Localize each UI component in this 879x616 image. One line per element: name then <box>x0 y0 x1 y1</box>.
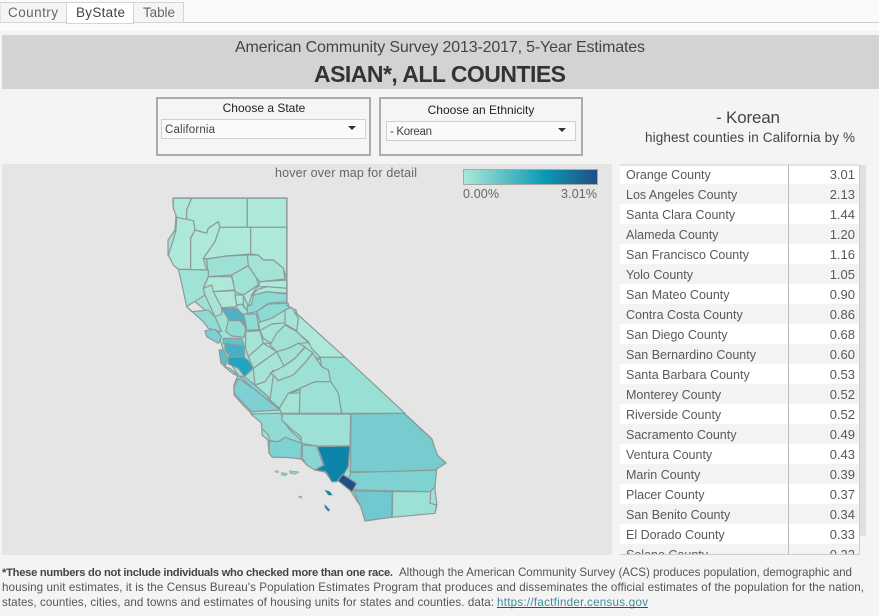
table rows: 0.33 <box>830 527 855 542</box>
filter: Choose an Ethnicity: Choose an Ethnicity <box>428 103 534 117</box>
header band <box>2 35 879 89</box>
filter: Choose an Ethnicity: - Korean <box>390 126 432 138</box>
table rows: Santa Barbara County <box>626 368 750 382</box>
table rows: 0.32 <box>830 547 855 562</box>
title: ASIAN*, ALL COUNTIES <box>314 61 566 87</box>
eastern counties <box>270 305 405 413</box>
map hint: hover over map for detail <box>275 166 417 180</box>
table rows: Placer County <box>626 488 705 502</box>
table rows: San Bernardino County <box>626 348 757 362</box>
link: https://factfinder.census.gov <box>497 596 648 609</box>
table rows: Contra Costa County <box>626 308 743 322</box>
table rows: Marin County <box>626 468 701 482</box>
table heading: highest counties in California by % <box>645 130 855 145</box>
panel: county table <box>620 164 866 562</box>
table rows: 1.05 <box>830 267 855 282</box>
tab: ByState: ByState <box>76 5 125 20</box>
tab bar <box>0 2 184 24</box>
table rows: Ventura County <box>626 448 713 462</box>
table rows: Solano County <box>626 548 709 562</box>
table rows: 0.68 <box>830 327 855 342</box>
table rows: San Diego County <box>626 328 728 342</box>
footnote: Although the American Community Survey (ACS) produces population, demographic and <box>399 566 852 579</box>
table rows: El Dorado County <box>626 528 725 542</box>
map legend: 0.00% <box>463 187 499 201</box>
filter: Choose a State <box>157 98 370 155</box>
tab: Country <box>0 2 66 22</box>
panel: map <box>2 164 612 555</box>
table rows: Monterey County <box>626 388 722 402</box>
northern counties <box>168 198 289 332</box>
southern counties <box>251 413 446 521</box>
table rows: 1.20 <box>830 227 855 242</box>
table rows: 0.53 <box>830 367 855 382</box>
table rows: 0.86 <box>830 307 855 322</box>
table rows: 0.39 <box>830 467 855 482</box>
table rows: San Benito County <box>626 508 731 522</box>
table rows: 1.16 <box>830 247 855 262</box>
table rows: 0.37 <box>830 487 855 502</box>
table rows: Alameda County <box>626 228 719 242</box>
table rows: Orange County <box>626 168 712 182</box>
tab: ByState <box>66 2 134 24</box>
table rows: 0.43 <box>830 447 855 462</box>
table rows: Riverside County <box>626 408 722 422</box>
central interior counties <box>246 309 320 410</box>
bay area counties <box>205 308 280 412</box>
footnote <box>2 566 864 609</box>
table rows: Santa Clara County <box>626 208 736 222</box>
table rows: San Mateo County <box>626 288 730 302</box>
choropleth map of California counties <box>168 198 446 521</box>
table rows: 0.60 <box>830 347 855 362</box>
table rows: Los Angeles County <box>626 188 738 202</box>
tab: Table <box>134 2 184 22</box>
table rows: 1.44 <box>830 207 855 222</box>
tab: Table: Table <box>143 5 175 20</box>
footnote: *These numbers do not include individuals who checked more than one race. <box>2 567 393 579</box>
filter: Choose an Ethnicity <box>380 98 582 155</box>
table rows: Yolo County <box>626 268 694 282</box>
filter: Choose a State: California <box>165 124 216 136</box>
table rows: San Francisco County <box>626 248 750 262</box>
map legend: 3.01% <box>561 187 597 201</box>
footnote: housing unit estimates, it is the Census Bureau's Population Estimates Program that produces and disseminates the official estimates of the population for the nation, <box>2 581 864 594</box>
state silhouette <box>168 198 446 521</box>
table heading: - Korean <box>716 108 780 127</box>
footnote: states, counties, cities, and towns and estimates of housing units for states and counties. data: <box>2 596 494 609</box>
table heading <box>645 108 855 145</box>
table rows: 0.52 <box>830 407 855 422</box>
subtitle: American Community Survey 2013-2017, 5-Year Estimates <box>235 39 645 56</box>
table rows: Sacramento County <box>626 428 737 442</box>
tab: Country: Country <box>8 5 58 20</box>
table rows: 0.52 <box>830 387 855 402</box>
filter: Choose a State: Choose a State <box>223 101 306 115</box>
map legend <box>463 170 598 201</box>
table rows <box>626 167 855 562</box>
table rows: 0.49 <box>830 427 855 442</box>
table rows: 2.13 <box>830 187 855 202</box>
table rows: 0.90 <box>830 287 855 302</box>
table rows: 0.34 <box>830 507 855 522</box>
table rows: 3.01 <box>830 167 855 182</box>
